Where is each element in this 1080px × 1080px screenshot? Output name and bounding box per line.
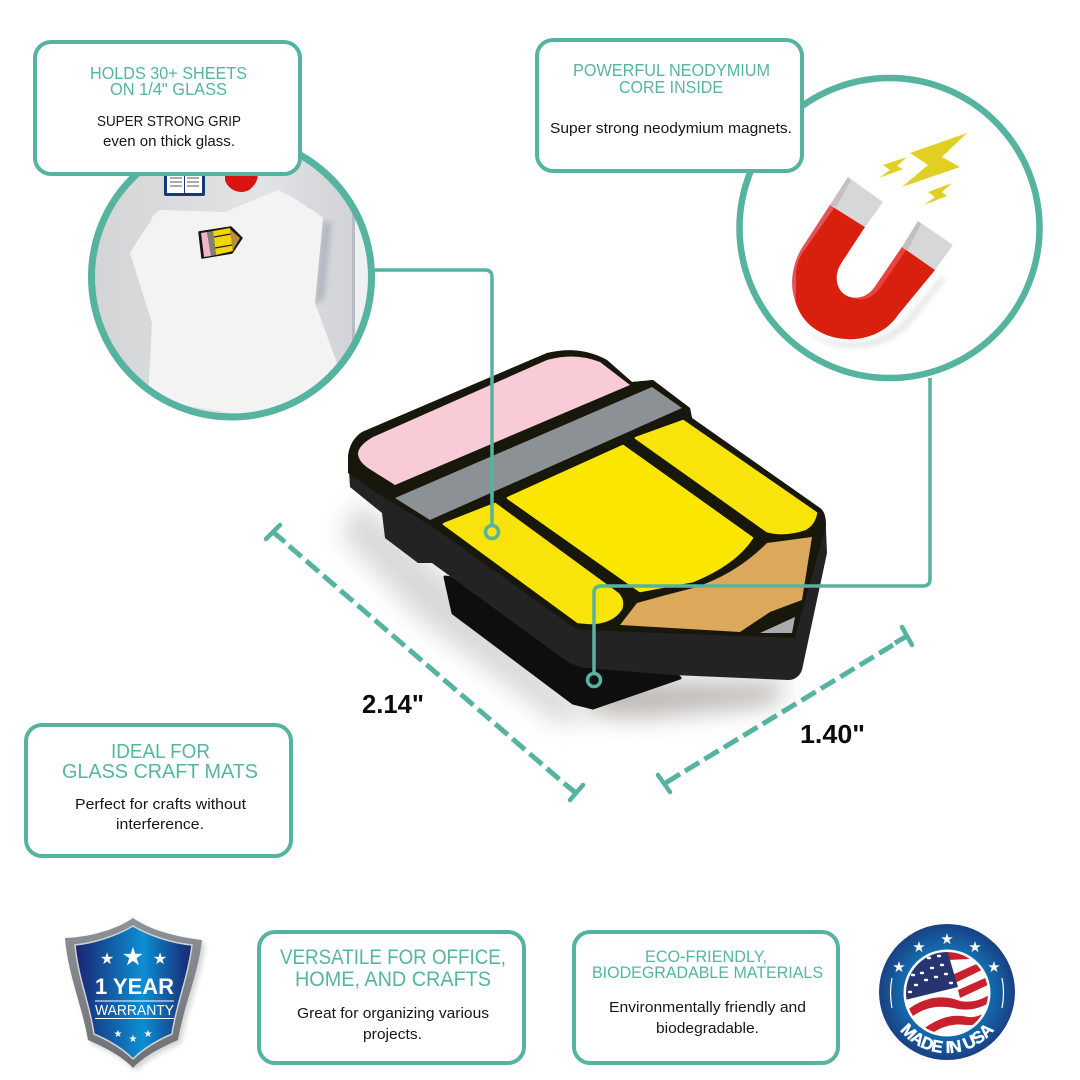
heading second line: ON 1/4" GLASS bbox=[110, 79, 227, 99]
connector: grip callout line bbox=[372, 270, 498, 538]
top face bbox=[348, 350, 826, 638]
graphite tip bbox=[760, 617, 795, 633]
dimension: 2.14 inch length bbox=[266, 525, 583, 800]
heading second line: BIODEGRADABLE MATERIALS bbox=[592, 963, 823, 982]
seal stars bbox=[892, 930, 1001, 976]
panel: magnet illustration circle bbox=[740, 78, 1040, 378]
stars top: ★ bbox=[122, 942, 144, 971]
body text second line: interference. bbox=[116, 816, 204, 833]
body text: Great for organizing various bbox=[297, 1005, 489, 1022]
yellow stripe left bbox=[444, 504, 622, 623]
callout: powerful neodymium core bbox=[537, 40, 802, 171]
heading: HOLDS 30+ SHEETS bbox=[90, 63, 247, 83]
magnet base block bbox=[445, 577, 680, 708]
icon: small pencil magnet bbox=[199, 227, 242, 258]
icon: horseshoe magnet bbox=[792, 177, 953, 339]
yellow stripe middle bbox=[508, 446, 752, 591]
heading: ECO-FRIENDLY, bbox=[645, 947, 767, 966]
heading second line: GLASS CRAFT MATS bbox=[62, 760, 258, 783]
heading second line: CORE INSIDE bbox=[619, 77, 723, 97]
seal stars: ★ bbox=[940, 930, 954, 948]
warranty label: WARRANTY bbox=[95, 1003, 174, 1019]
dimension: 2.14 inch length: 2.14" bbox=[362, 689, 424, 719]
icon: product shadow right bbox=[590, 680, 790, 718]
body text: SUPER STRONG GRIP bbox=[97, 113, 241, 130]
seal stars: ★ bbox=[968, 938, 982, 956]
callout: eco-friendly materials bbox=[574, 932, 838, 1063]
body text: Super strong neodymium magnets. bbox=[550, 120, 792, 137]
stars bottom: ★ bbox=[129, 1034, 138, 1045]
stars bottom bbox=[114, 1029, 153, 1045]
callout: holds 30+ sheets bbox=[35, 42, 300, 174]
flag bbox=[906, 952, 988, 1032]
seal stars: ★ bbox=[987, 958, 1001, 976]
seal text: MADE IN USA bbox=[900, 1022, 994, 1054]
callout: ideal for glass craft mats bbox=[26, 725, 291, 856]
body text second line: biodegradable. bbox=[656, 1020, 759, 1037]
metal band bbox=[395, 387, 682, 520]
warranty years: 1 YEAR bbox=[95, 974, 174, 999]
callout: versatile for office bbox=[259, 932, 524, 1063]
dimension: 1.40 inch width bbox=[658, 627, 912, 792]
badge: made in USA seal bbox=[879, 924, 1015, 1060]
heading: IDEAL FOR bbox=[111, 740, 210, 763]
wood tip bbox=[620, 537, 812, 632]
heading: POWERFUL NEODYMIUM bbox=[573, 60, 770, 80]
connector: neodymium callout line bbox=[588, 378, 930, 686]
yellow stripe right bbox=[636, 421, 816, 533]
icon: book magnet bbox=[164, 176, 205, 196]
seal stars: ★ bbox=[912, 938, 926, 956]
badge: 1 year warranty shield bbox=[65, 918, 205, 1071]
icon: product shadow left bbox=[340, 500, 590, 725]
body text: Environmentally friendly and bbox=[609, 999, 806, 1016]
shield face bbox=[75, 926, 192, 1059]
stars right: ★ bbox=[153, 949, 167, 968]
icon: apple magnet bbox=[225, 176, 258, 192]
body text second line: projects. bbox=[363, 1026, 422, 1043]
icon: magnet shadow bbox=[800, 276, 945, 348]
stars left: ★ bbox=[100, 949, 114, 968]
seal stars: ★ bbox=[892, 958, 906, 976]
magnet outer silhouette bbox=[348, 350, 827, 680]
stars bottom: ★ bbox=[114, 1029, 123, 1040]
illustration: pencil magnet product bbox=[348, 350, 827, 708]
body text: Perfect for crafts without bbox=[75, 796, 247, 813]
eraser bbox=[358, 356, 630, 485]
heading second line: HOME, AND CRAFTS bbox=[295, 968, 491, 991]
heading: VERSATILE FOR OFFICE, bbox=[280, 946, 506, 969]
body text second line: even on thick glass. bbox=[103, 133, 235, 150]
stars bottom: ★ bbox=[144, 1029, 153, 1040]
shield frame bbox=[65, 918, 202, 1068]
panel: photo of magnet holding paper on glass bbox=[88, 152, 375, 420]
icon: lightning bolts bbox=[879, 133, 967, 205]
dimension: 1.40 inch width: 1.40" bbox=[800, 719, 865, 749]
